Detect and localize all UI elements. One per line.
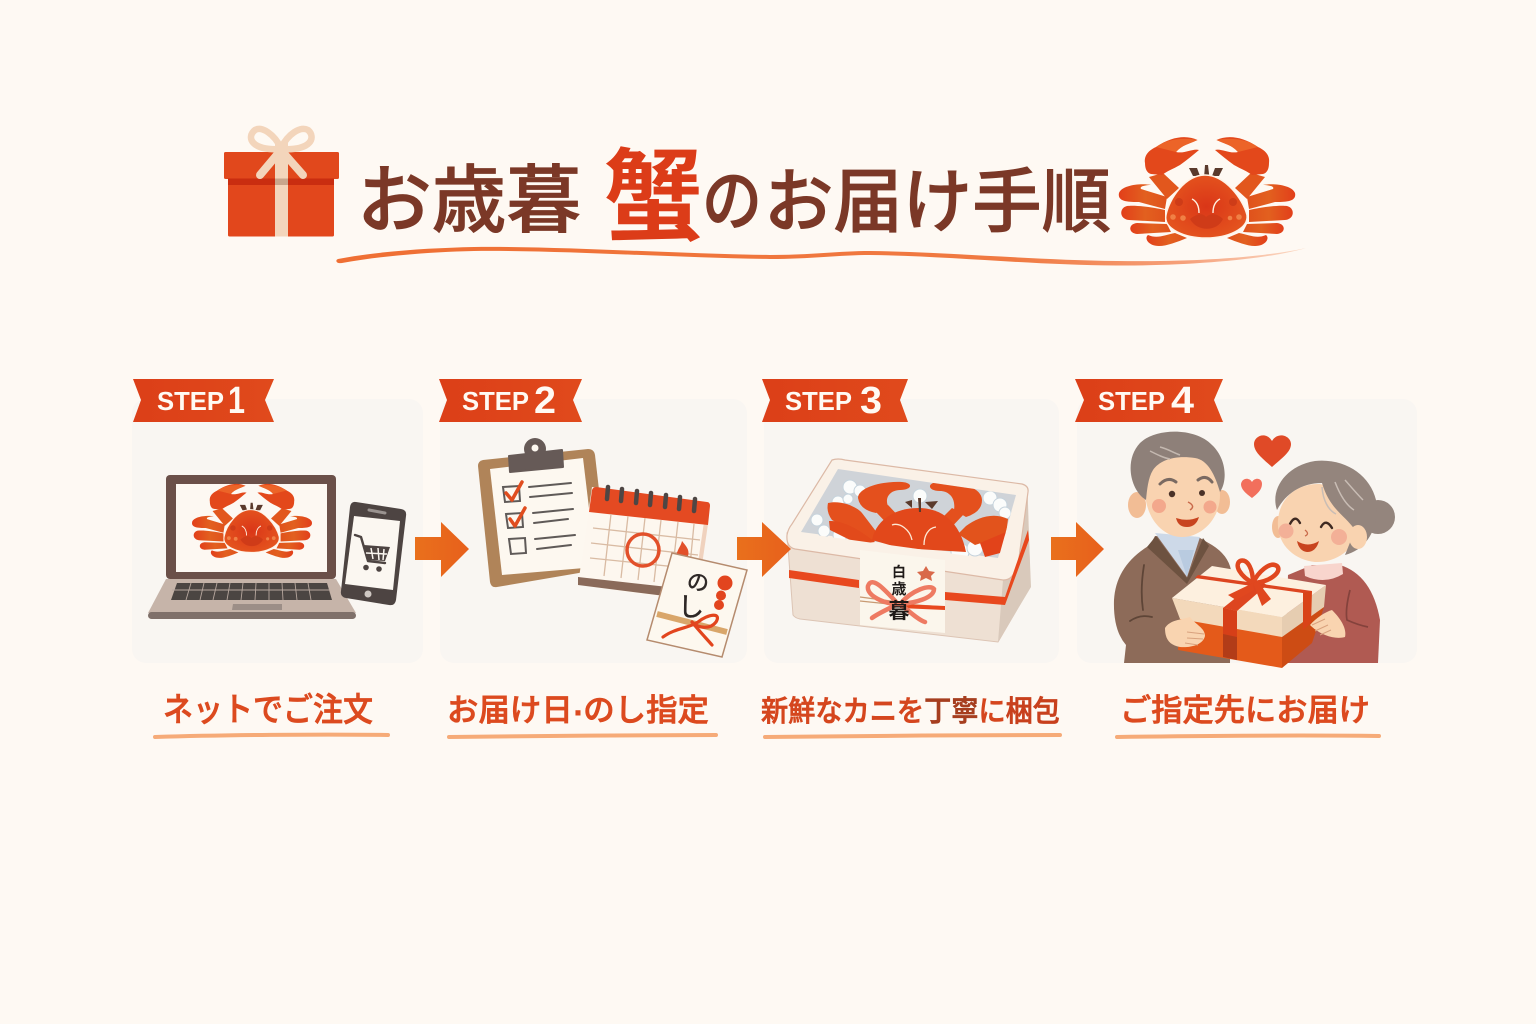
arrow 2 — [737, 522, 791, 577]
icon: hearts — [1241, 435, 1291, 498]
noshi label — [860, 550, 945, 633]
icon: laptop — [148, 475, 356, 619]
icon: cart — [355, 535, 390, 572]
icon: gift box — [224, 129, 339, 236]
caption underline 2 — [449, 735, 716, 737]
noshi label: 白 — [892, 564, 906, 580]
badge: step 1: 1 — [228, 380, 245, 422]
illustration: hands — [1165, 610, 1345, 647]
title underline — [336, 247, 1306, 266]
icon: smartphone with cart — [341, 502, 406, 605]
illustration: gift box — [1172, 561, 1326, 668]
caption underline 1 — [155, 735, 388, 737]
icon: crab — [1119, 137, 1295, 246]
caption: step 1: ネットでご注文 — [163, 691, 373, 728]
panel: step 3 — [786, 458, 1031, 642]
title — [357, 142, 1111, 254]
arrow 1 — [415, 522, 469, 577]
icon: crab on screen — [192, 484, 312, 558]
panel: step 2 — [440, 399, 747, 663]
noshi label: 暮 — [888, 600, 910, 623]
badge: step 3: STEP — [785, 386, 852, 416]
badge: step 3: 3 — [860, 380, 882, 422]
illustration: grandmother — [1272, 461, 1395, 663]
caption underline 3 — [765, 735, 1060, 737]
panel: step 1 — [132, 399, 423, 663]
icon: calendar — [578, 487, 710, 602]
title: 蟹 — [604, 142, 703, 254]
caption: step 3: 新鮮なカニを丁寧に梱包 — [761, 695, 1060, 728]
icon: noshi card: し — [678, 592, 704, 622]
badge: step 4: STEP — [1098, 386, 1165, 416]
title: お歳暮 — [357, 159, 581, 242]
crushed ice and crab — [811, 480, 1011, 561]
caption: step 4: ご指定先にお届け — [1120, 693, 1370, 728]
icon: packed crab box — [787, 459, 1031, 642]
badge: step 1 — [133, 379, 274, 422]
badge: step 2: STEP — [462, 386, 529, 416]
title: お届け手順 — [764, 163, 1111, 241]
badge: step 3 — [762, 379, 908, 422]
noshi label: 歳 — [891, 581, 907, 598]
title: の — [702, 164, 762, 240]
badge: step 1: STEP — [157, 386, 224, 416]
caption underline 4 — [1117, 736, 1379, 737]
icon: clipboard checklist — [478, 438, 608, 587]
badge: step 4 — [1075, 379, 1223, 422]
illustration: grandfather — [1114, 432, 1231, 663]
panel: step 4 — [1077, 399, 1417, 668]
badge: step 2: 2 — [534, 380, 556, 422]
icon: noshi card: の — [685, 569, 711, 596]
badge: step 2 — [439, 379, 582, 422]
arrow 3 — [1051, 522, 1104, 577]
icon: noshi card — [647, 553, 747, 657]
caption: step 2: お届け日·のし指定 — [447, 693, 709, 728]
badge: step 4: 4 — [1171, 380, 1194, 422]
